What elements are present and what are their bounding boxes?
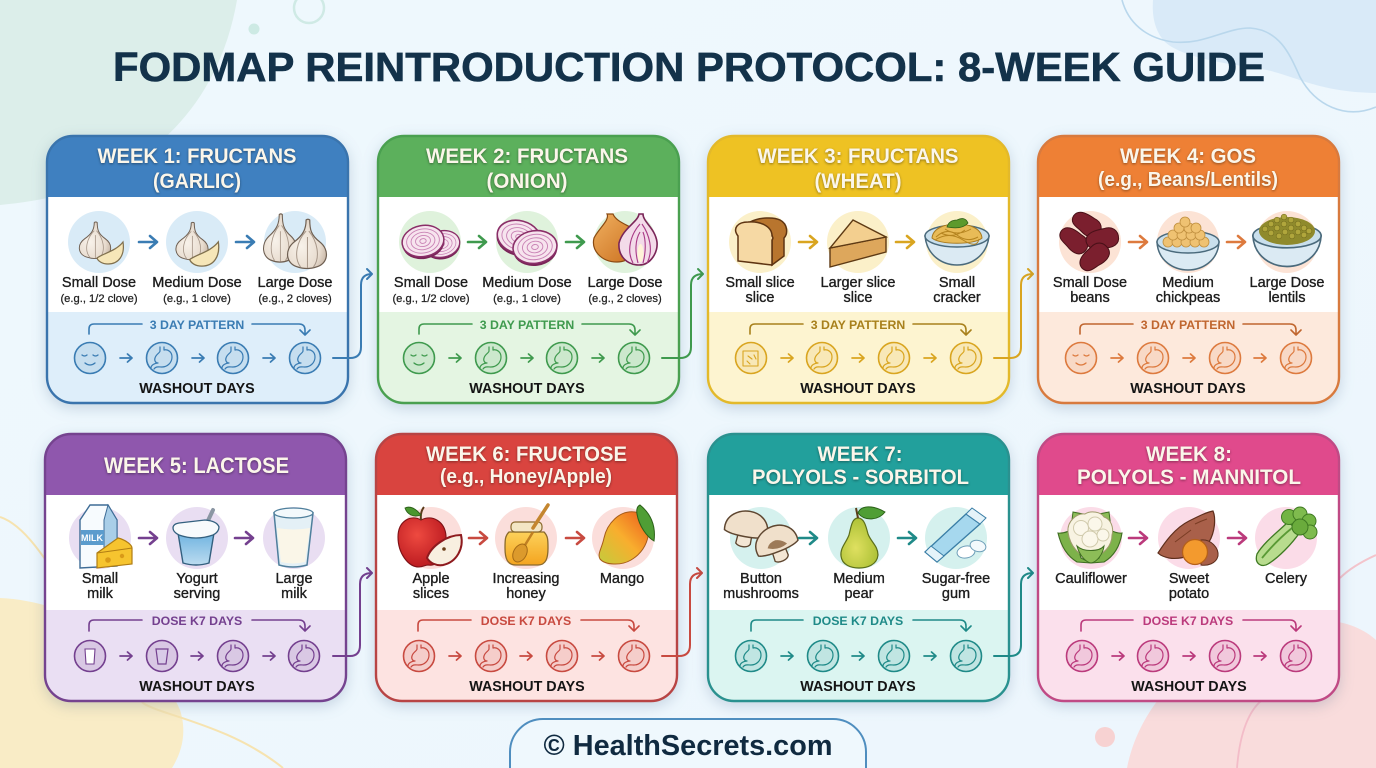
washout day icons (1066, 640, 1312, 672)
washout label: WASHOUT DAYS (800, 679, 916, 695)
pattern label with bracket arrow: DOSE K7 DAYS (813, 614, 903, 628)
icon: medium onion dose (493, 211, 559, 273)
icon: cauliflower (1058, 507, 1122, 569)
arrow (566, 532, 584, 544)
icon: small onion dose (399, 211, 463, 273)
icon: medium garlic dose (166, 211, 228, 273)
arrow (469, 532, 487, 544)
icon: small garlic dose (68, 211, 130, 273)
washout label: WASHOUT DAYS (800, 381, 916, 397)
icon: celery (1255, 507, 1317, 569)
washout label: WASHOUT DAYS (139, 679, 255, 695)
panel: week 4 GOS (1038, 136, 1339, 403)
pattern label with bracket arrow (89, 318, 310, 335)
card frame (1038, 434, 1339, 701)
icon: bread slice (729, 211, 791, 273)
icon: glass of milk (263, 507, 325, 569)
item labels: Medium (1162, 275, 1214, 291)
icon: sweet potato (1158, 507, 1220, 569)
pattern label with bracket arrow: DOSE K7 DAYS (152, 614, 242, 628)
panel: week 5 lactose (45, 434, 372, 701)
item labels: Small (939, 275, 975, 291)
icon: pear (828, 507, 890, 569)
pattern label with bracket arrow (89, 614, 310, 631)
icon: milk carton and cheese (69, 505, 132, 569)
heading: WEEK 8: (1146, 443, 1232, 466)
panel: week 6 fructose (376, 434, 702, 701)
heading: POLYOLS - MANNITOL (1077, 466, 1301, 489)
item labels: Sugar-free (922, 571, 990, 587)
arrow (139, 532, 157, 544)
heading: POLYOLS - SORBITOL (752, 466, 969, 489)
heading: WEEK 1: FRUCTANS (98, 145, 296, 168)
icon: honey jar (495, 505, 557, 569)
arrow (1129, 236, 1147, 248)
washout day icons (404, 342, 650, 374)
card frame (45, 434, 346, 701)
pattern label with bracket arrow (418, 614, 639, 631)
heading: WEEK 3: FRUCTANS (758, 145, 958, 168)
pattern label with bracket arrow: DOSE K7 DAYS (481, 614, 571, 628)
icon: lentil bowl (1253, 211, 1321, 273)
card frame (1038, 136, 1339, 403)
item labels: milk (87, 586, 114, 602)
washout label: WASHOUT DAYS (469, 381, 585, 397)
heading: WEEK 4: GOS (1120, 145, 1256, 168)
item labels: cracker (933, 290, 981, 306)
arrow (1129, 532, 1147, 544)
arrow to week 3 (662, 269, 703, 358)
heading: (ONION) (486, 170, 568, 193)
arrow (1227, 236, 1245, 248)
card frame (376, 434, 677, 701)
item labels: slices (413, 586, 449, 602)
item labels: Large Dose (1250, 275, 1324, 291)
arrow (139, 236, 157, 248)
arrow (896, 236, 914, 248)
arrow (236, 236, 254, 248)
heading (426, 443, 627, 488)
heading: WEEK 2: FRUCTANS (426, 145, 628, 168)
heading: WEEK 5: LACTOSE (104, 453, 289, 478)
dose labels: (e.g., 2 cloves) (258, 293, 332, 305)
heading (98, 145, 296, 193)
heading: (WHEAT) (814, 170, 902, 193)
icon: mushrooms (722, 507, 803, 569)
pattern label with bracket arrow: 3 DAY PATTERN (480, 318, 574, 332)
icon: milk carton and cheese: MILK (81, 533, 103, 543)
item labels: Apple (412, 571, 450, 587)
icon: apple (398, 507, 462, 569)
arrow (566, 236, 584, 248)
heading: WEEK 7: (818, 443, 902, 466)
washout label: WASHOUT DAYS (469, 679, 585, 695)
washout label: WASHOUT DAYS (1130, 381, 1246, 397)
washout day icons (736, 640, 982, 672)
item labels: Celery (1265, 571, 1308, 587)
icon: large garlic dose (264, 211, 326, 273)
icon: beans (1055, 209, 1121, 277)
dose labels (392, 275, 662, 305)
item labels (412, 571, 644, 602)
item labels: mushrooms (723, 586, 799, 602)
item labels: Increasing (493, 571, 559, 587)
pattern label with bracket arrow (1080, 318, 1301, 335)
item labels: slice (745, 290, 775, 306)
heading (752, 443, 969, 489)
pattern label with bracket arrow (750, 318, 971, 335)
icon: mango (592, 505, 654, 569)
card frame (47, 136, 348, 403)
heading (1098, 145, 1278, 191)
dose labels: Large Dose (258, 275, 332, 291)
item labels: honey (506, 586, 546, 602)
panel: week 7 polyols sorbitol (708, 434, 1033, 701)
washout label: WASHOUT DAYS (139, 381, 255, 397)
item labels: Cauliflower (1055, 571, 1127, 587)
dose labels: Small Dose (394, 275, 468, 291)
card frame (378, 136, 679, 403)
item labels: potato (1169, 586, 1209, 602)
item labels: Small (82, 571, 118, 587)
item labels: milk (281, 586, 308, 602)
item labels: pear (844, 586, 874, 602)
icon: chickpea bowl (1157, 211, 1219, 273)
item labels: Yogurt (176, 571, 218, 587)
arrow (799, 236, 817, 248)
arrow to week 7 (662, 568, 702, 656)
dose labels: Medium Dose (152, 275, 242, 291)
arrow (468, 236, 486, 248)
dose labels: (e.g., 1/2 clove) (392, 293, 470, 305)
washout label: WASHOUT DAYS (1131, 679, 1247, 695)
heading: (e.g., Beans/Lentils) (1098, 169, 1278, 191)
item labels: beans (1070, 290, 1110, 306)
item labels: Button (740, 571, 782, 587)
washout day icons (736, 342, 982, 374)
pattern label with bracket arrow: DOSE K7 DAYS (1143, 614, 1233, 628)
panel: week 3 fructans wheat (708, 136, 1033, 403)
title: FODMAP REINTRODUCTION PROTOCOL: 8-WEEK GUIDE (113, 44, 1265, 90)
icon: sugar-free gum (925, 507, 987, 569)
arrow to week 4 (994, 269, 1033, 358)
item labels: lentils (1268, 290, 1306, 306)
icon: larger slice wedge (827, 211, 889, 273)
dose labels: (e.g., 1 clove) (493, 293, 561, 305)
arrow (799, 532, 817, 544)
heading (758, 145, 958, 193)
heading (426, 145, 628, 193)
footer badge (510, 719, 866, 768)
item labels (1055, 571, 1308, 602)
washout day icons (1066, 342, 1312, 374)
item labels (1053, 275, 1324, 306)
item labels: Small Dose (1053, 275, 1127, 291)
card frame (708, 434, 1009, 701)
pattern label with bracket arrow (1081, 614, 1301, 631)
pattern label with bracket arrow: 3 DAY PATTERN (150, 318, 244, 332)
washout day icons (74, 342, 320, 374)
icon: yogurt (166, 507, 228, 569)
footer badge: © HealthSecrets.com (544, 730, 832, 762)
arrow (235, 532, 253, 544)
panel: week 8 polyols mannitol (1038, 434, 1339, 701)
item labels: chickpeas (1156, 290, 1220, 306)
dose labels: Large Dose (588, 275, 662, 291)
item labels: serving (174, 586, 220, 602)
heading: (e.g., Honey/Apple) (440, 466, 612, 488)
arrow to week 2 (333, 269, 372, 358)
pattern label with bracket arrow (419, 318, 640, 335)
item labels: Mango (600, 571, 644, 587)
item labels (723, 571, 990, 602)
pattern label with bracket arrow: 3 DAY PATTERN (811, 318, 905, 332)
item labels: Sweet (1169, 571, 1209, 587)
item labels: Large (275, 571, 313, 587)
arrow (1228, 532, 1246, 544)
washout day icons (74, 640, 320, 672)
heading: WEEK 6: FRUCTOSE (426, 443, 627, 466)
washout day icons (404, 640, 650, 672)
arrow to week 8 (994, 568, 1033, 656)
item labels: slice (843, 290, 873, 306)
item labels: Larger slice (821, 275, 895, 291)
arrow to week 6 (333, 568, 372, 656)
pattern label with bracket arrow: 3 DAY PATTERN (1141, 318, 1235, 332)
dose labels (60, 275, 332, 305)
pattern label with bracket arrow (751, 614, 971, 631)
item labels: Medium (833, 571, 885, 587)
panel: week 1 fructans garlic (47, 136, 372, 403)
dose labels: Small Dose (62, 275, 136, 291)
item labels (725, 275, 981, 306)
dose labels: (e.g., 1 clove) (163, 293, 231, 305)
arrow (898, 532, 916, 544)
heading (1077, 443, 1301, 489)
card frame (708, 136, 1009, 403)
dose labels: (e.g., 1/2 clove) (60, 293, 138, 305)
item labels: Small slice (725, 275, 795, 291)
dose labels: Medium Dose (482, 275, 572, 291)
heading: (GARLIC) (153, 170, 241, 193)
item labels: gum (942, 586, 970, 602)
icon: large onion dose (593, 211, 657, 273)
item labels (82, 571, 313, 602)
panel: week 2 fructans onion (378, 136, 703, 403)
icon: pasta bowl (925, 211, 989, 273)
dose labels: (e.g., 2 cloves) (588, 293, 662, 305)
